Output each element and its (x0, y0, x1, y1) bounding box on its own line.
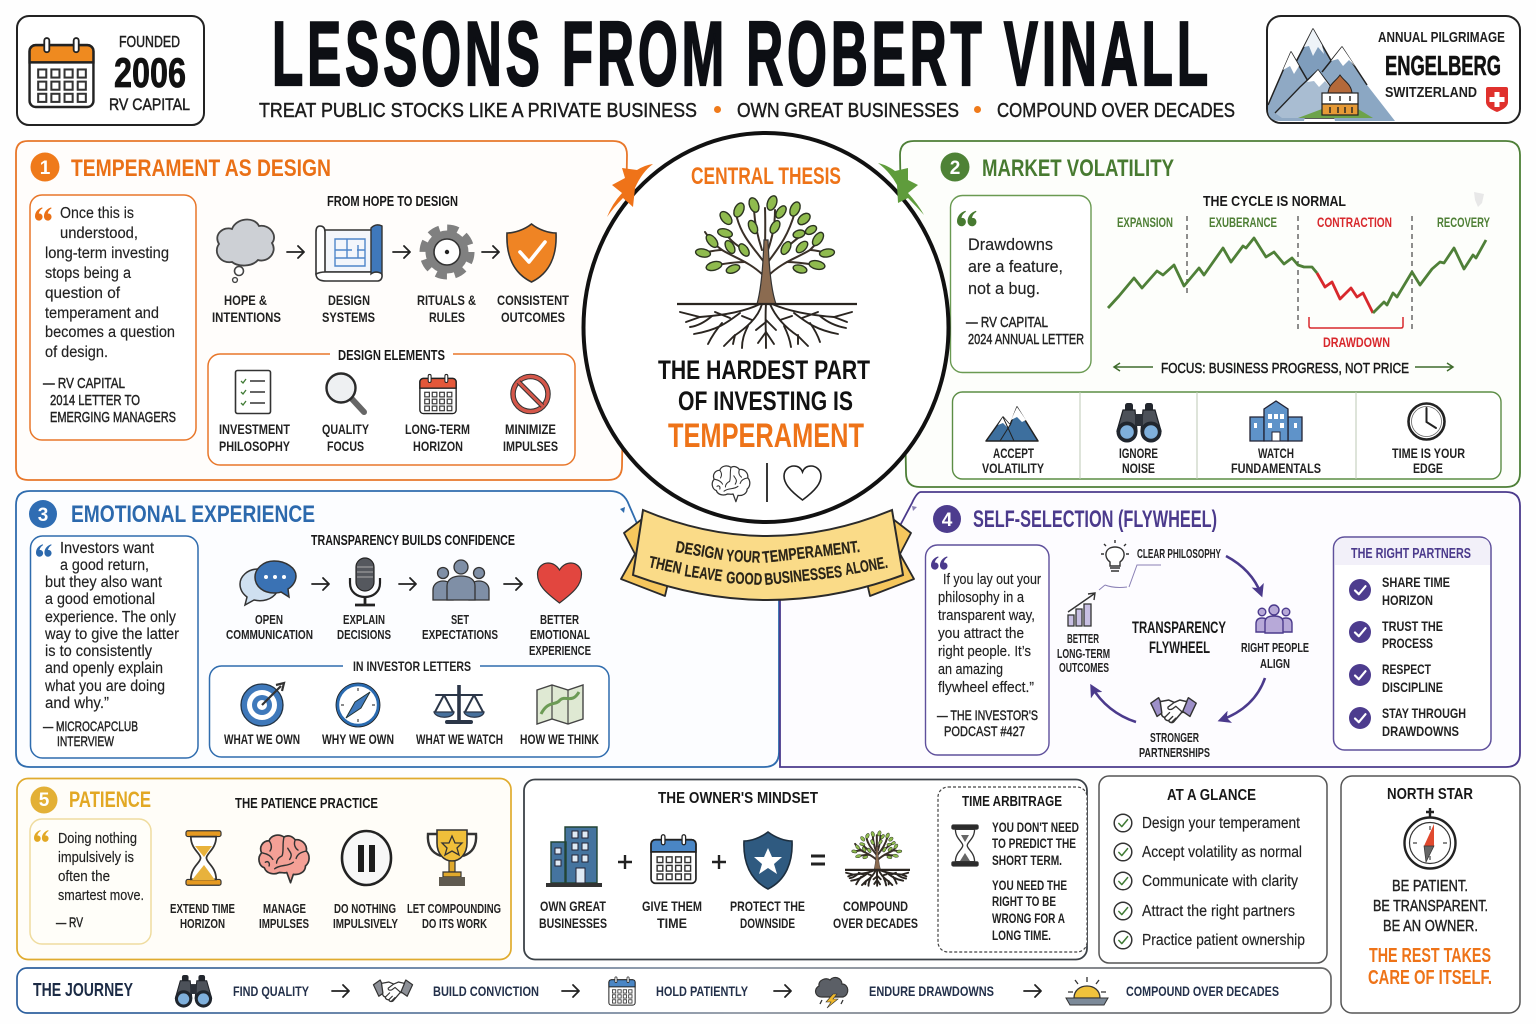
quote box: — MICROCAPCLUB (43, 719, 138, 734)
quote box (30, 195, 196, 440)
callout: time arbitrage: YOU NEED THE (992, 878, 1067, 893)
element: investment philosophy (219, 370, 291, 454)
step: set expectations: EXPECTATIONS (422, 627, 498, 642)
equation item: own great businesses (539, 827, 607, 931)
journey: endure drawdowns: ENDURE DRAWDOWNS (869, 983, 994, 999)
practice: do nothing impulsively: IMPULSIVELY (333, 916, 398, 931)
flywheel diagram (1057, 540, 1309, 760)
node: right people align (1241, 605, 1309, 671)
callout: time arbitrage: YOU DON'T NEED (992, 820, 1079, 835)
panel heading (30, 786, 151, 814)
principle: ignore noise (1116, 403, 1162, 476)
panel: Engelberg pilgrimage badge (1267, 16, 1520, 123)
panel heading: MARKET VOLATILITY (982, 155, 1174, 182)
practice: manage impulses: MANAGE (263, 901, 306, 916)
ribbon message: YOUR (726, 547, 761, 567)
quote box: If you lay out your (943, 572, 1041, 588)
arrow (287, 246, 304, 258)
quote box: transparent way, (938, 608, 1035, 624)
journey: endure drawdowns (816, 977, 994, 1008)
quote box: philosophy in a (938, 590, 1025, 606)
ribbon message: BUSINESSES (764, 563, 843, 589)
node: stronger partnerships: PARTNERSHIPS (1139, 745, 1210, 760)
quote box: a good return, (60, 557, 149, 574)
step: better emotional experience: EMOTIONAL (530, 627, 590, 642)
cycle chart: EXUBERANCE (1209, 214, 1277, 230)
partner: share time horizon (1349, 574, 1450, 608)
quote box: understood, (60, 225, 138, 242)
panel: founded 2006 badge (17, 16, 204, 125)
step: design systems (316, 225, 382, 325)
arrow (504, 578, 522, 590)
central thesis label: CENTRAL THESIS (691, 163, 841, 190)
partner: trust the process: TRUST THE (1382, 618, 1443, 634)
principle: accept volatility: ACCEPT (993, 445, 1034, 461)
step: hope and intentions (212, 220, 281, 325)
quote box: Doing nothing (58, 831, 137, 847)
practice: extend time horizon: EXTEND TIME (170, 901, 235, 916)
item: how we think: HOW WE THINK (520, 731, 599, 747)
quote box: are a feature, (968, 257, 1063, 276)
quote box: Once this is (60, 205, 134, 222)
sub-heading: from hope to design: FROM HOPE TO DESIGN (327, 193, 458, 210)
equation item: give them time: TIME (657, 915, 687, 931)
thesis statement: THE HARDEST PART (658, 355, 870, 385)
founded text (109, 34, 190, 114)
node: better long-term outcomes: BETTER (1067, 631, 1099, 646)
arrow (774, 985, 791, 997)
partner: trust the process: PROCESS (1382, 635, 1433, 651)
ribbon message: ALONE. (844, 554, 889, 579)
quote box: and openly explain (45, 660, 163, 677)
arrow (562, 985, 579, 997)
step: rituals and rules (417, 228, 476, 325)
element: minimize impulses (503, 376, 558, 454)
callout: time arbitrage: RIGHT TO BE (992, 894, 1056, 909)
quote box: smartest move. (58, 888, 144, 904)
icon: tree with roots (677, 194, 857, 348)
partner: stay through drawdowns: DRAWDOWNS (1382, 723, 1459, 739)
step: open communication (226, 561, 313, 642)
element: long-term horizon: LONG-TERM (405, 421, 470, 437)
element: quality focus (322, 374, 369, 454)
panel 2: market volatility (900, 141, 1520, 487)
quote box (926, 545, 1049, 755)
panel heading: 3 (38, 505, 48, 526)
partner: respect discipline: DISCIPLINE (1382, 679, 1443, 695)
thesis statement (658, 355, 870, 455)
equation item: protect the downside: PROTECT THE (730, 898, 805, 914)
journey: compound over decades (1066, 977, 1279, 1005)
item: what we watch (416, 685, 503, 747)
sub-panel: design elements (208, 347, 575, 465)
ribbon banner (621, 510, 914, 600)
step: explain decisions: EXPLAIN (343, 612, 385, 627)
panel 5: patience (17, 778, 511, 960)
quote box: 2014 LETTER TO (50, 393, 140, 409)
item: why we own: WHY WE OWN (322, 731, 394, 747)
principle: watch fundamentals (1231, 401, 1321, 476)
element: quality focus: FOCUS (327, 438, 364, 454)
cycle chart: RECOVERY (1437, 214, 1490, 230)
quote box: Investors want (60, 540, 155, 557)
principle: time is your edge: EDGE (1413, 460, 1443, 476)
quote box (950, 196, 1091, 372)
node: stronger partnerships (1139, 698, 1210, 760)
step: better emotional experience (529, 563, 591, 658)
quote box: of design. (45, 344, 108, 361)
step: consistent outcomes: CONSISTENT (497, 292, 569, 308)
ribbon message (647, 538, 889, 589)
arrow: philosophy to people (1226, 556, 1261, 594)
principle: accept volatility: VOLATILITY (982, 460, 1045, 476)
panel heading: PATIENCE (69, 787, 151, 812)
practice: extend time horizon (170, 831, 235, 931)
journey: find quality (175, 975, 310, 1008)
panel 1: temperament as design (16, 141, 627, 480)
quote box: but they also want (45, 574, 163, 591)
partner: respect discipline (1349, 661, 1443, 695)
node: better long-term outcomes: LONG-TERM (1057, 646, 1110, 661)
focus note with arrows: FOCUS: BUSINESS PROGRESS, NOT PRICE (1161, 360, 1409, 377)
panel: at a glance (1099, 776, 1327, 963)
item: communicate with clarity: Communicate with clarity (1142, 873, 1298, 890)
north star message: BE AN OWNER. (1383, 918, 1478, 935)
thesis statement: TEMPERAMENT (668, 417, 864, 455)
partner: stay through drawdowns (1349, 705, 1466, 739)
quote box: — RV CAPITAL (43, 376, 125, 392)
quote box: a good emotional (45, 591, 155, 608)
cycle chart: DRAWDOWN (1323, 334, 1390, 350)
node: right people align: RIGHT PEOPLE (1241, 640, 1309, 655)
step: open communication: OPEN (255, 612, 283, 627)
practice: let compounding do its work (407, 830, 501, 931)
panel heading: EMOTIONAL EXPERIENCE (71, 501, 315, 528)
thesis statement: OF INVESTING IS (678, 386, 853, 416)
icon: compass (1404, 808, 1456, 868)
item: what we own: WHAT WE OWN (224, 731, 300, 747)
arrow (482, 246, 499, 258)
accent: purple dot on panel edge (912, 506, 917, 511)
panel heading (940, 152, 1174, 182)
sub-panel: in investor letters: IN INVESTOR LETTERS (353, 658, 471, 674)
north star message: BE TRANSPARENT. (1373, 898, 1488, 915)
panel: north star: NORTH STAR (1387, 786, 1473, 803)
partner: share time horizon: SHARE TIME (1382, 574, 1450, 590)
principle: ignore noise: NOISE (1122, 460, 1155, 476)
element: quality focus: QUALITY (322, 421, 369, 437)
principle: ignore noise: IGNORE (1119, 445, 1158, 461)
arrow: partnerships to outcomes (1092, 687, 1136, 722)
step: design systems: SYSTEMS (322, 309, 375, 325)
step: hope and intentions: HOPE & (224, 292, 267, 308)
practice: manage impulses (259, 835, 309, 931)
central thesis circle (584, 133, 948, 522)
quote box: is to consistently (45, 643, 152, 660)
quote box: and why.” (45, 695, 109, 712)
journey: hold patiently (609, 977, 749, 1005)
node: stronger partnerships: STRONGER (1150, 730, 1199, 745)
item: what we own (224, 683, 300, 747)
quote box (30, 819, 151, 944)
cycle chart: CONTRACTION (1317, 214, 1392, 230)
node: clear philosophy (1101, 540, 1221, 571)
panel heading: 1 (40, 158, 51, 179)
item: accept volatility as normal: Accept volatility as normal (1142, 844, 1302, 861)
Engelberg text: ANNUAL PILGRIMAGE (1378, 29, 1505, 46)
principle: time is your edge (1392, 404, 1465, 476)
quote box: what you are doing (44, 678, 165, 695)
panel heading: SELF-SELECTION (FLYWHEEL) (973, 506, 1217, 533)
node: better long-term outcomes (1057, 593, 1110, 675)
element: long-term horizon (405, 374, 470, 454)
quote box: often the (58, 869, 110, 885)
arrow (332, 985, 349, 997)
panel heading (933, 505, 1217, 533)
the right partners list: THE RIGHT PARTNERS (1351, 545, 1471, 562)
arrow (312, 578, 329, 590)
quote box: question of (45, 285, 121, 302)
item: attract the right partners: Attract the right partners (1142, 903, 1295, 920)
practice: let compounding do its work: DO ITS WORK (422, 916, 487, 931)
plus sign (618, 855, 632, 869)
panel: north star (1341, 776, 1520, 1013)
panel heading: 4 (942, 510, 953, 531)
north star message: BE PATIENT. (1392, 878, 1468, 895)
panel heading: TEMPERAMENT AS DESIGN (71, 155, 331, 182)
flywheel centre label (1132, 618, 1226, 657)
callout: time arbitrage: TO PREDICT THE (992, 836, 1076, 851)
panel heading (30, 152, 331, 182)
arrow (1024, 985, 1041, 997)
step: rituals and rules: RULES (429, 309, 465, 325)
flywheel centre label: FLYWHEEL (1149, 638, 1210, 657)
partner: stay through drawdowns: STAY THROUGH (1382, 705, 1466, 721)
step: design systems: DESIGN (328, 292, 370, 308)
sub-heading: transparency builds confidence: TRANSPARENCY BUILDS CONFIDENCE (311, 532, 515, 549)
quote box: 2024 ANNUAL LETTER (968, 332, 1084, 348)
icon: mountains and building (1268, 29, 1395, 121)
quote box: — RV (56, 915, 83, 930)
quote box: temperament and (45, 305, 159, 322)
quote box: long-term investing (45, 245, 169, 262)
ribbon message: TEMPERAMENT. (761, 538, 861, 567)
quote box (30, 536, 198, 758)
step: explain decisions (337, 558, 391, 642)
cycle chart: THE CYCLE IS NORMAL (1203, 193, 1346, 210)
north star message: CARE OF ITSELF. (1368, 967, 1492, 989)
accent: orange star on circle (607, 164, 653, 217)
quote box: PODCAST #427 (944, 724, 1025, 739)
journey: compound over decades: COMPOUND OVER DECADES (1126, 983, 1279, 999)
heading: THE OWNER'S MINDSET (658, 790, 818, 807)
quote box: stops being a (45, 265, 131, 282)
item: what we watch: WHAT WE WATCH (416, 731, 503, 747)
node: clear philosophy: CLEAR PHILOSOPHY (1137, 546, 1221, 561)
journey: hold patiently: HOLD PATIENTLY (656, 983, 749, 999)
quote box: EMERGING MANAGERS (50, 410, 176, 426)
item: how we think (520, 685, 599, 747)
quote box: impulsively is (58, 850, 134, 866)
practice: let compounding do its work: LET COMPOUNDING (407, 901, 501, 916)
callout: time arbitrage: TIME ARBITRAGE (962, 793, 1062, 810)
journey: find quality: FIND QUALITY (233, 983, 310, 999)
sub-heading: the patience practice: THE PATIENCE PRACTICE (235, 795, 378, 812)
practice: extend time horizon: HORIZON (180, 916, 225, 931)
quote box: experience. The only (45, 609, 176, 626)
ribbon message: LEAVE (683, 562, 724, 585)
Engelberg text: SWITZERLAND (1385, 85, 1477, 101)
step: better emotional experience: EXPERIENCE (529, 643, 591, 658)
equation item: protect the downside: DOWNSIDE (740, 915, 795, 931)
item: why we own (322, 683, 394, 747)
north star message: THE REST TAKES (1369, 945, 1491, 967)
panel heading: 2 (950, 158, 960, 179)
quote box: an amazing (938, 662, 1003, 678)
callout: time arbitrage (938, 787, 1087, 952)
element: long-term horizon: HORIZON (413, 438, 463, 454)
journey: build conviction (373, 980, 539, 1002)
the right partners list (1334, 537, 1491, 750)
arrow (399, 578, 416, 590)
panel heading (29, 500, 315, 528)
cycle chart: EXPANSION (1117, 214, 1173, 230)
step: open communication: COMMUNICATION (226, 627, 313, 642)
principle: accept volatility (982, 407, 1045, 476)
element: minimize impulses: IMPULSES (503, 438, 558, 454)
principles strip (952, 392, 1501, 479)
node: right people align: ALIGN (1260, 656, 1290, 671)
step: hope and intentions: INTENTIONS (212, 309, 281, 325)
panel 4: self-selection flywheel (780, 492, 1520, 767)
cycle chart (1108, 192, 1490, 350)
element: investment philosophy: INVESTMENT (219, 421, 290, 437)
quote box: right people. It’s (938, 644, 1031, 660)
equation item: compound over decades: COMPOUND (843, 898, 908, 914)
subtitle strip: COMPOUND OVER DECADES (997, 100, 1235, 122)
panel: the journey (17, 968, 1331, 1013)
founded text: 2006 (114, 49, 186, 96)
equation item: give them time: GIVE THEM (642, 898, 702, 914)
accent: blue dot on panel edge (620, 507, 625, 513)
icon: orange calendar (30, 38, 93, 107)
flywheel centre label: TRANSPARENCY (1132, 618, 1226, 637)
principle: watch fundamentals: FUNDAMENTALS (1231, 460, 1321, 476)
panel: the journey: THE JOURNEY (33, 980, 133, 1000)
icon: Swiss shield (1486, 87, 1508, 112)
step: set expectations (422, 560, 498, 642)
plus sign (712, 855, 726, 869)
sub-panel: design elements: DESIGN ELEMENTS (338, 347, 445, 364)
Engelberg text (1378, 29, 1505, 101)
item: design your temperament: Design your temperament (1142, 815, 1301, 832)
quote box: flywheel effect.” (938, 680, 1034, 696)
founded text: RV CAPITAL (109, 95, 190, 114)
step: set expectations: SET (451, 612, 469, 627)
equation item: give them time (642, 835, 702, 931)
callout: time arbitrage: WRONG FOR A (992, 911, 1065, 926)
panel heading: 5 (39, 790, 50, 811)
equation item: compound over decades (833, 830, 918, 931)
partner: share time horizon: HORIZON (1382, 592, 1433, 608)
quote box: way to give the latter (44, 626, 179, 643)
quote box: — RV CAPITAL (966, 315, 1048, 331)
equation item: own great businesses: OWN GREAT (540, 898, 606, 914)
subtitle strip (259, 100, 1235, 122)
element: investment philosophy: PHILOSOPHY (219, 438, 291, 454)
ribbon message: DESIGN (674, 538, 725, 564)
callout: time arbitrage: LONG TIME. (992, 928, 1051, 943)
equation item: protect the downside (730, 832, 805, 931)
item: practice patient ownership: Practice patient ownership (1142, 932, 1305, 949)
arrow: people to partnerships (1221, 678, 1265, 720)
node: better long-term outcomes: OUTCOMES (1059, 660, 1109, 675)
equation item: compound over decades: OVER DECADES (833, 915, 918, 931)
step: better emotional experience: BETTER (540, 612, 579, 627)
practice: do nothing impulsively (333, 831, 398, 931)
step: consistent outcomes (497, 224, 569, 325)
panel: the owner's mindset (524, 780, 1087, 960)
principle: time is your edge: TIME IS YOUR (1392, 445, 1465, 461)
quote box: you attract the (938, 626, 1024, 642)
quote box: Drawdowns (968, 235, 1053, 254)
quote box: becomes a question (45, 324, 175, 341)
step: explain decisions: DECISIONS (337, 627, 391, 642)
subtitle strip: OWN GREAT BUSINESSES (737, 100, 959, 122)
founded text: FOUNDED (119, 34, 180, 51)
practice: do nothing impulsively: DO NOTHING (334, 901, 396, 916)
partner: respect discipline: RESPECT (1382, 661, 1431, 677)
journey: build conviction: BUILD CONVICTION (433, 983, 539, 999)
ribbon message: GOOD (726, 569, 763, 589)
icons: brain and heart (712, 463, 821, 502)
accent: green star on circle (878, 163, 924, 215)
element: minimize impulses: MINIMIZE (505, 421, 556, 437)
quote box: — THE INVESTOR'S (937, 708, 1038, 723)
sub-panel: in investor letters (210, 658, 609, 757)
practice: manage impulses: IMPULSES (259, 916, 309, 931)
quote box: not a bug. (968, 279, 1040, 298)
arrow (393, 246, 410, 258)
subtitle strip: TREAT PUBLIC STOCKS LIKE A PRIVATE BUSINESS (259, 100, 697, 122)
equals sign (811, 856, 825, 864)
panel 3: emotional experience (16, 491, 779, 767)
panel: at a glance: AT A GLANCE (1167, 787, 1256, 804)
principle: watch fundamentals: WATCH (1258, 445, 1294, 461)
ribbon message: THEN (647, 553, 683, 578)
equation item: own great businesses: BUSINESSES (539, 915, 607, 931)
step: consistent outcomes: OUTCOMES (501, 309, 565, 325)
step: rituals and rules: RITUALS & (417, 292, 476, 308)
partner: trust the process (1349, 618, 1443, 651)
north star message (1368, 878, 1492, 989)
callout: time arbitrage: SHORT TERM. (992, 853, 1062, 868)
quote box: INTERVIEW (57, 734, 114, 749)
